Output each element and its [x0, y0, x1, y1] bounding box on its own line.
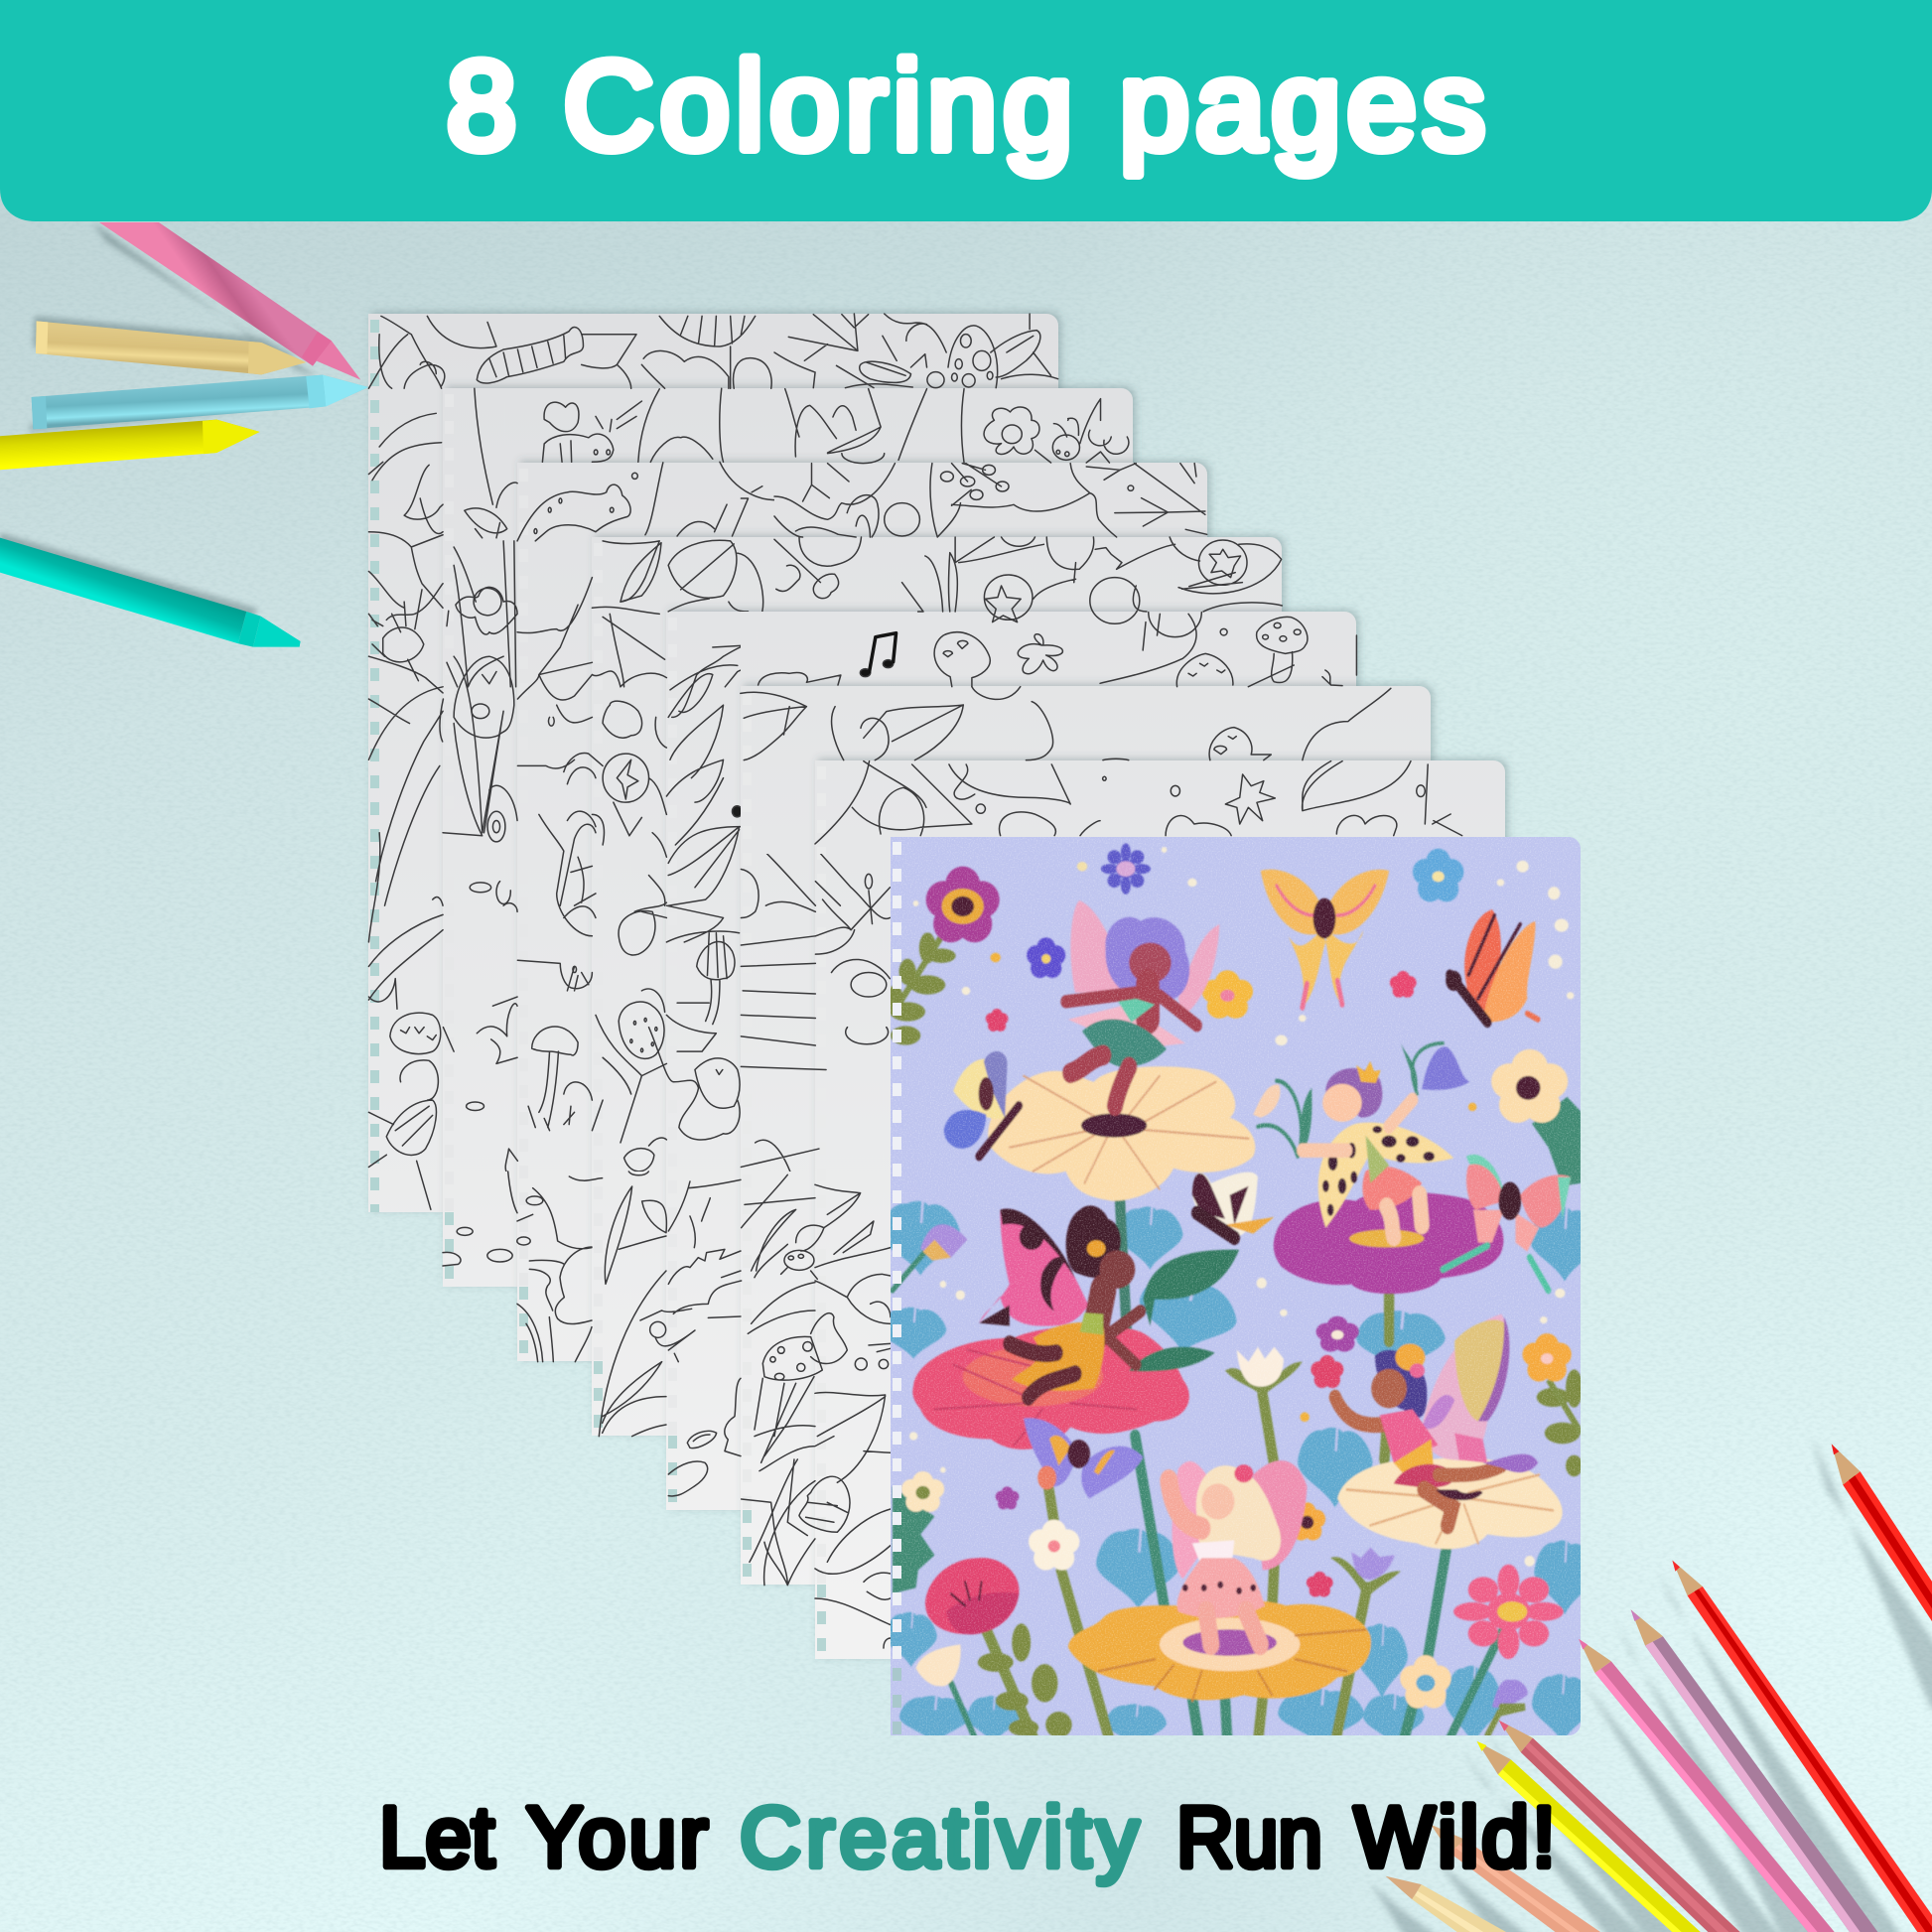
big cream flower top	[988, 1066, 1255, 1201]
page 1 line art strip	[368, 316, 771, 388]
pencil shadows	[1370, 1437, 1932, 1932]
page 3 strip art	[517, 463, 763, 612]
cream pencil	[1386, 1876, 1506, 1932]
butterfly: brown and white	[1192, 1173, 1274, 1238]
ferns	[893, 1097, 1582, 1593]
fairy: dark skin on coral flower	[979, 1205, 1141, 1398]
bottom tagline: Let	[379, 1790, 494, 1885]
pale yellow crayon	[36, 321, 306, 374]
top-left magenta flower	[926, 867, 1000, 942]
crayon shadows	[0, 222, 318, 619]
orange flower bottom	[1068, 1598, 1371, 1701]
page 2 strip art	[443, 388, 808, 1111]
pink pencil	[1579, 1639, 1835, 1932]
page 5 strip art: frog, mushrooms, clover	[759, 614, 1356, 687]
cover spiral holes	[893, 842, 901, 1735]
colored pencils bottom right	[1370, 1437, 1932, 1932]
butterfly: yellow moth	[1261, 870, 1389, 1008]
stack of seven line-art pages	[368, 314, 1505, 1659]
bottom tagline	[379, 1790, 1556, 1885]
red poppy	[925, 1558, 1019, 1634]
flower stems	[893, 1195, 1501, 1742]
bottom tagline: Creativity	[740, 1790, 1139, 1885]
colored fairy cover page	[881, 837, 1599, 1747]
pink crayon	[99, 222, 360, 380]
fairy: ladybug wings	[1303, 1061, 1453, 1237]
pink daisy	[1453, 1565, 1564, 1659]
page 4 strawberries	[619, 989, 666, 1172]
teal crayon	[0, 538, 301, 647]
small flowers	[901, 843, 1572, 1709]
page sheets with punched holes	[368, 314, 1505, 1659]
page 1 left strip art	[368, 413, 443, 1209]
cover background	[891, 837, 1582, 1735]
line art: left strips upper region	[368, 316, 890, 1209]
blue ginkgo leaves	[881, 1200, 1599, 1747]
fairy: lilac hair on daisy	[1065, 900, 1219, 1106]
page 7 strip art: star, leaf, petals	[815, 761, 1462, 844]
line art: lower left strips	[443, 1172, 891, 1648]
butterfly: purple and yellow	[1024, 1418, 1143, 1498]
page 5 oak branch and music note	[667, 646, 741, 905]
cream flower lower right	[1337, 1457, 1563, 1549]
rose pencil	[1499, 1721, 1740, 1932]
page 3 left strip art	[505, 578, 596, 1173]
fairy: blonde on orange flower	[1169, 1460, 1308, 1644]
bottom tagline: Your	[526, 1790, 708, 1885]
crayons top left	[0, 222, 368, 647]
red pencil far right	[1832, 1445, 1932, 1755]
page 6 strip art: leaves, mushroom, cloud	[741, 687, 1391, 760]
olive leaves on branches	[887, 932, 1583, 1737]
page 3 top-right leaf and stamens	[774, 464, 1207, 537]
page 1 top-right	[774, 314, 1058, 388]
fairy: purple hair on cream flower	[1335, 1314, 1538, 1525]
red pencil	[1672, 1561, 1932, 1932]
cream and orange dots	[909, 847, 1574, 1567]
light blue crayon	[32, 375, 368, 429]
bottom tagline: Wild!	[1354, 1790, 1556, 1885]
coral pink flower	[912, 1325, 1189, 1449]
bottom tagline: Run	[1176, 1790, 1322, 1885]
top banner	[0, 0, 1932, 221]
salmon pencil	[1431, 1825, 1600, 1932]
page 4 strip art	[564, 543, 709, 1143]
leaves beside dark fairy	[1129, 1250, 1239, 1371]
butterfly: mint and pink	[1443, 1155, 1571, 1291]
page 2 butterfly	[454, 656, 517, 842]
music notes	[860, 633, 897, 677]
page 2 top-right with flower and bee	[785, 389, 1129, 464]
page 5 strip art	[647, 645, 741, 1141]
page 6 strip art	[741, 833, 826, 1209]
mauve pencil	[1631, 1609, 1878, 1932]
banner title: 8 Coloring pages	[447, 36, 1485, 176]
line art: lower right strips	[741, 614, 1462, 844]
tulips and bells	[915, 1043, 1528, 1735]
butterfly: blue and cream	[944, 1051, 1019, 1157]
page 7 strip art	[815, 762, 890, 1044]
lemon yellow crayon	[0, 420, 260, 470]
yellow pencil	[1477, 1741, 1701, 1932]
line art: upper right of strips	[774, 314, 1282, 637]
soft speckle over art	[891, 837, 1582, 1735]
page 4 top-right berries and stars	[774, 537, 1282, 637]
butterfly: orange	[1446, 909, 1538, 1023]
magenta flower	[1274, 1192, 1503, 1294]
